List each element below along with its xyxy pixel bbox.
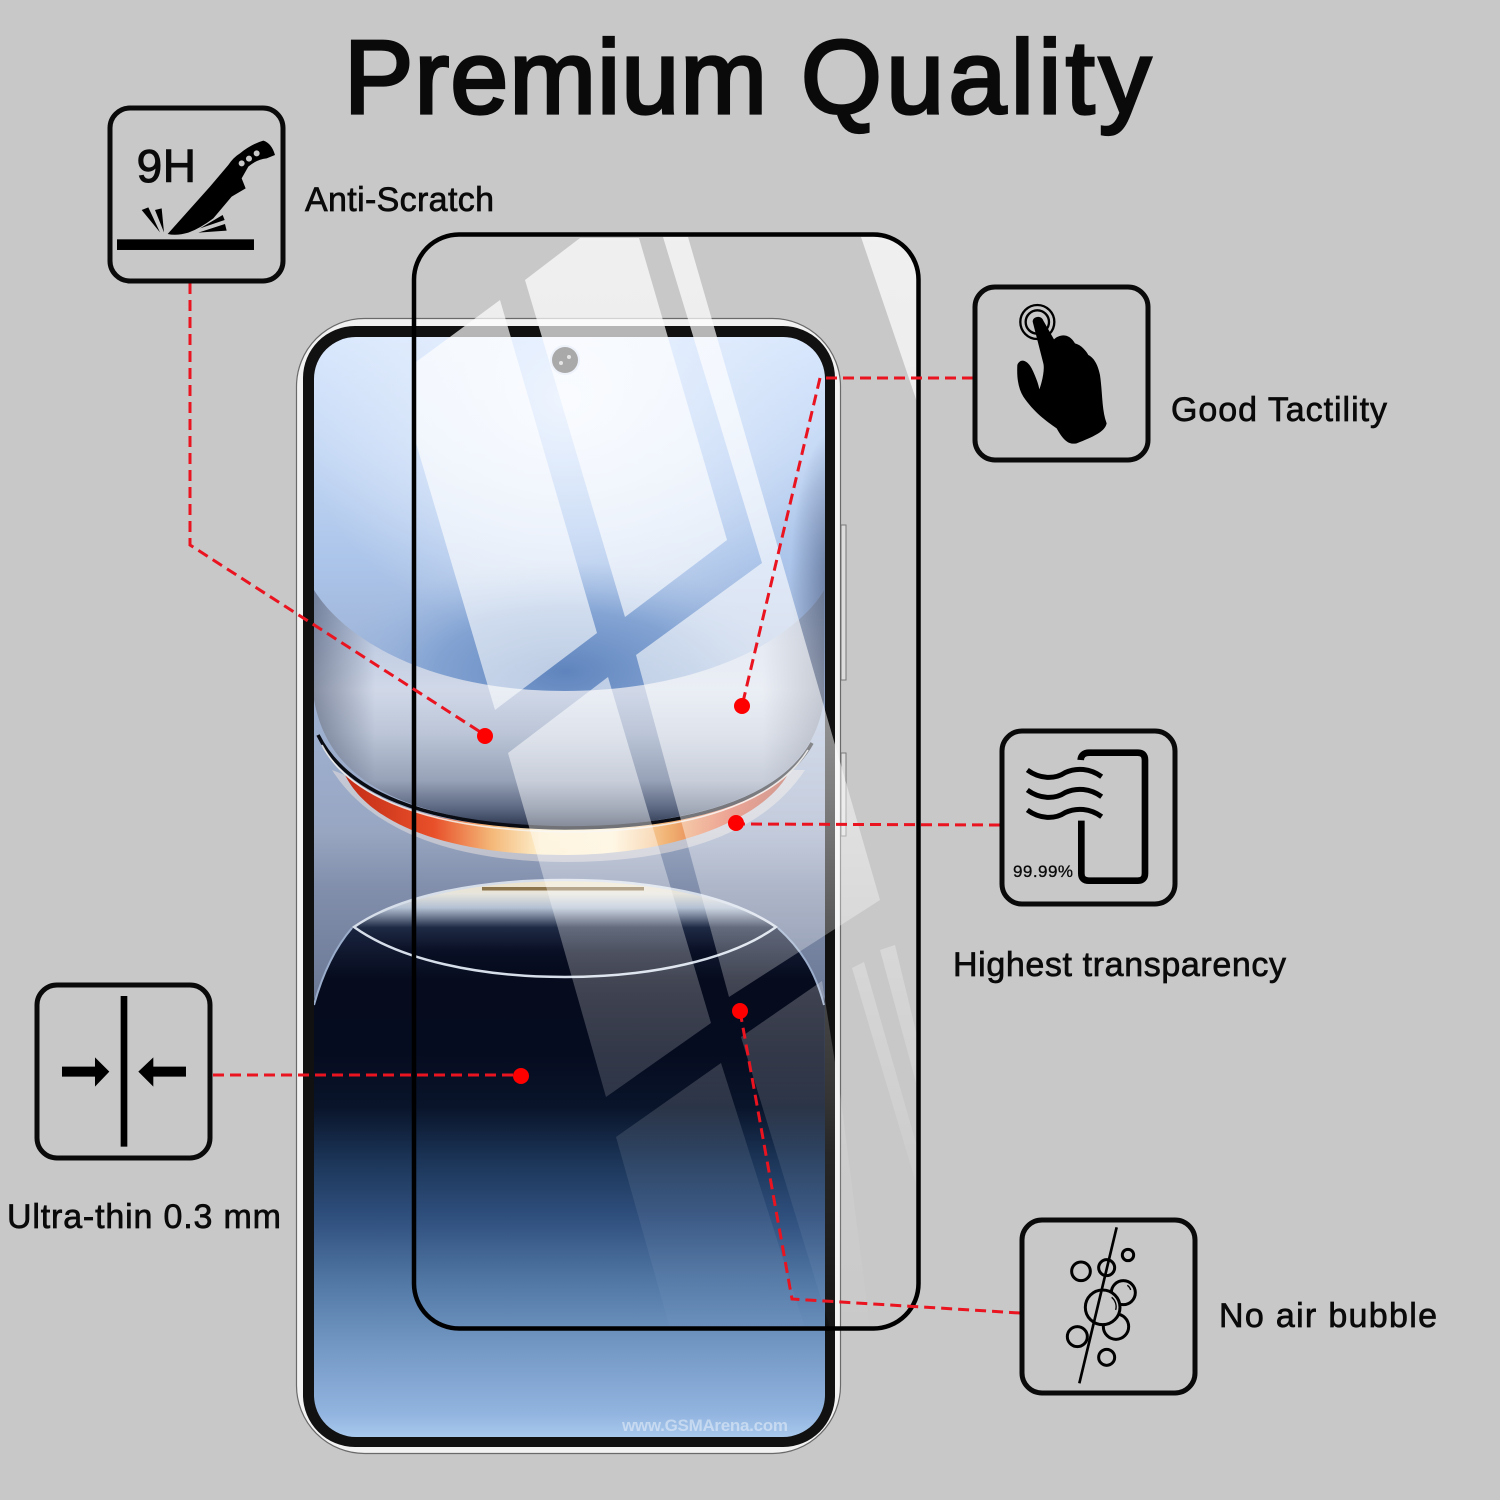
feature: good tactility: [975, 287, 1387, 460]
phone screen wallpaper: [314, 337, 825, 1437]
icon: knife on surface: 9H: [137, 140, 196, 192]
title: [344, 20, 1151, 136]
line: no air bubble: [740, 1011, 1020, 1313]
feature: ultra-thin: [7, 985, 281, 1236]
title: Quality: [801, 20, 1151, 136]
red callout lines: [190, 283, 1020, 1313]
feature: anti-scratch: [110, 108, 494, 281]
phone frame: [296, 318, 840, 1454]
line: anti-scratch: [190, 283, 485, 735]
label: anti-scratch: Anti-Scratch: [305, 181, 494, 219]
icon frame: good tactility: [975, 287, 1148, 460]
icon frame: no air bubble: [1022, 1220, 1195, 1393]
icon: inward arrows: [62, 996, 186, 1147]
title: Premium: [344, 20, 767, 136]
icon text: 99.99%: 99.99%: [1013, 862, 1073, 881]
line: good tactility: [742, 378, 973, 706]
feature: no air bubble: [1022, 1220, 1437, 1393]
label: ultra-thin: Ultra-thin 0.3 mm: [7, 1198, 281, 1236]
glass reflections: [416, 237, 918, 1328]
icon frame: anti-scratch: [110, 108, 283, 281]
line: ultra-thin: [213, 1074, 520, 1076]
icon: bubbles: [1067, 1227, 1135, 1383]
icon frame: transparency: [1002, 731, 1175, 904]
phone: [296, 318, 846, 1454]
label: good tactility: Good Tactility: [1171, 391, 1387, 429]
icon frame: ultra-thin: [37, 985, 210, 1158]
watermark: www.GSMArena.com: [621, 1416, 788, 1435]
icon: phone with waves: [1027, 753, 1145, 881]
line: transparency: [737, 824, 1000, 825]
label: highest transparency: Highest transparency: [953, 946, 1286, 984]
glass film outline: [414, 234, 918, 1328]
icon: knife on surface: [117, 140, 275, 250]
label: no air bubble: No air bubble: [1219, 1297, 1437, 1335]
red callout dots: [477, 698, 750, 1084]
front camera: [550, 345, 580, 375]
feature: highest transparency: [953, 731, 1286, 984]
icon: touching hand: [1017, 305, 1107, 444]
phone bezel: [303, 326, 835, 1447]
phone side buttons: [841, 525, 846, 836]
